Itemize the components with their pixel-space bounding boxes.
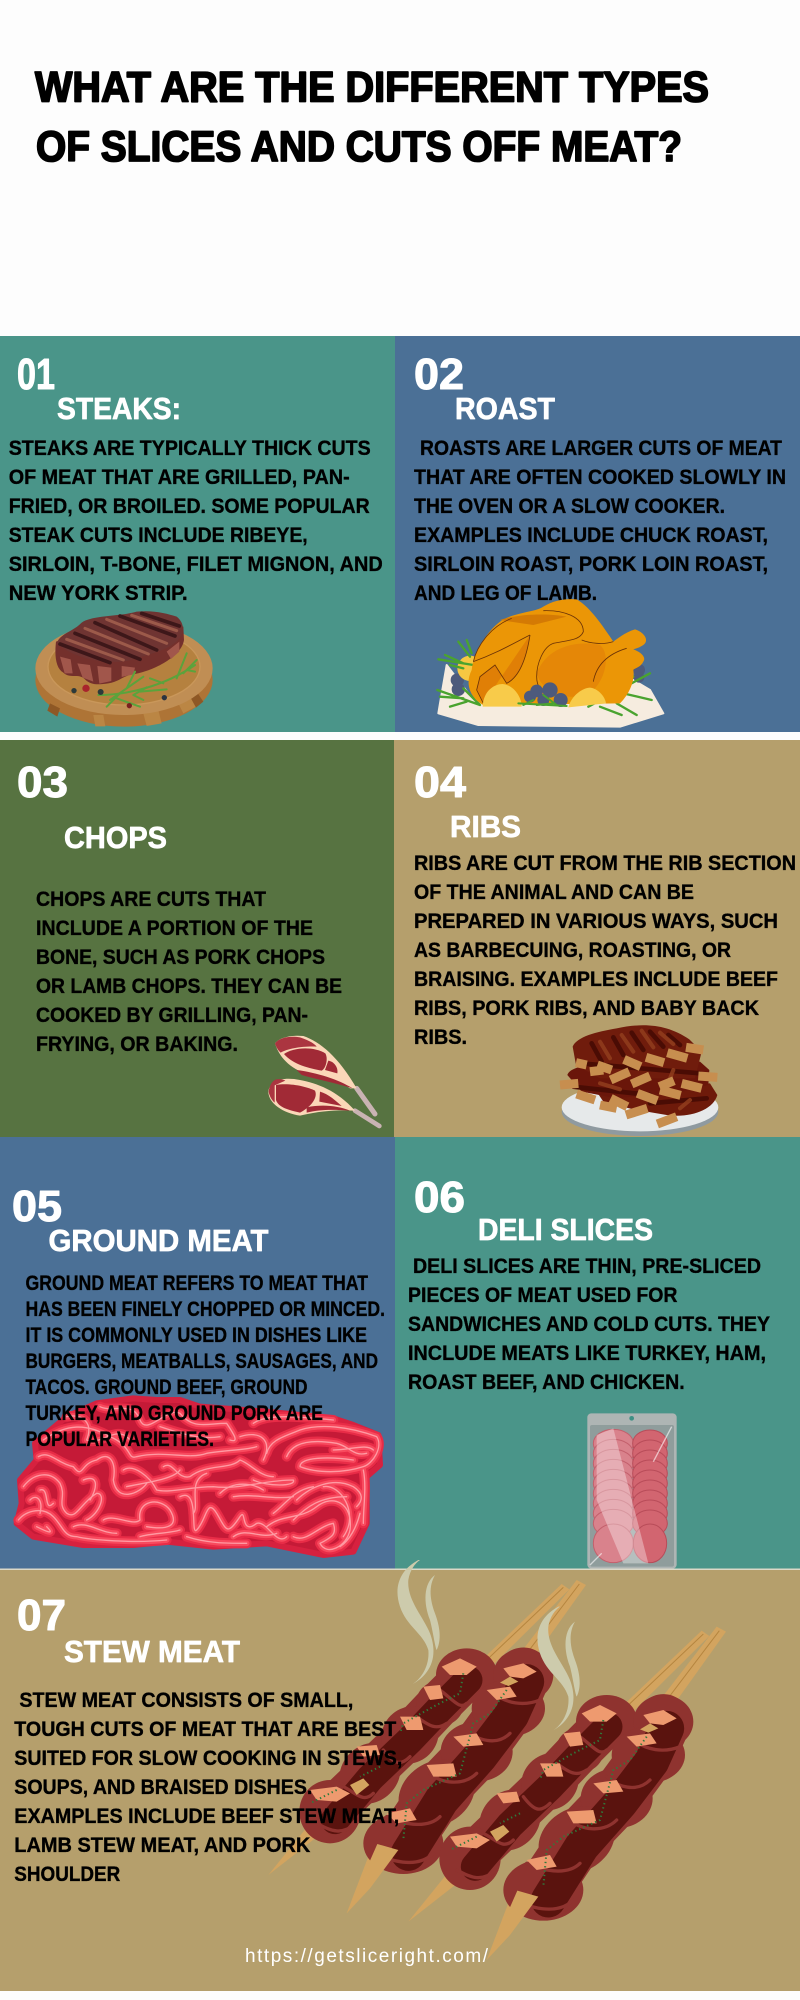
number 01: 01 (17, 350, 55, 399)
panel: 07 stew meat (0, 1560, 800, 1991)
text: deli description (408, 1255, 770, 1394)
heading: steaks: STEAKS: (57, 391, 181, 426)
text: chops description: INCLUDE A PORTION OF THE (36, 917, 313, 940)
text: ground meat description: BURGERS, MEATBALLS, SAUSAGES, AND (26, 1350, 378, 1373)
text: ground meat description: TACOS. GROUND BEEF, GROUND (26, 1376, 308, 1399)
text: steaks description: STEAKS ARE TYPICALLY THICK CUTS (9, 437, 371, 460)
number 04: 04 (414, 758, 467, 807)
text: chops description (36, 888, 342, 1056)
text: ground meat description: GROUND MEAT REFERS TO MEAT THAT (26, 1272, 368, 1295)
text: ribs description: OF THE ANIMAL AND CAN BE (414, 881, 694, 904)
text: ground meat description: POPULAR VARIETIES. (26, 1428, 214, 1451)
text: steaks description (9, 437, 383, 605)
text: roast description: AND LEG OF LAMB. (414, 582, 597, 605)
panel: 05 ground meat (0, 1137, 395, 1569)
text: deli description: ROAST BEEF, AND CHICKEN. (408, 1371, 685, 1394)
text: stew meat description: STEW MEAT CONSISTS OF SMALL, (19, 1689, 353, 1712)
text: ribs description: AS BARBECUING, ROASTING, OR (414, 939, 731, 962)
title: OF SLICES AND CUTS OFF MEAT? (36, 123, 682, 171)
heading: deli slices: DELI SLICES (478, 1212, 653, 1247)
text: ribs description (414, 852, 796, 1049)
number 03: 03 (17, 758, 68, 807)
text: chops description: OR LAMB CHOPS. THEY CAN BE (36, 975, 342, 998)
title: WHAT ARE THE DIFFERENT TYPES (35, 64, 709, 112)
text: chops description: COOKED BY GRILLING, PAN- (36, 1004, 308, 1027)
text: ribs description: RIBS. (414, 1026, 467, 1049)
text: stew meat description: SOUPS, AND BRAISED DISHES. (14, 1776, 312, 1799)
text: ground meat description: HAS BEEN FINELY CHOPPED OR MINCED. (26, 1298, 385, 1321)
text: steaks description: OF MEAT THAT ARE GRILLED, PAN- (9, 466, 350, 489)
icon: packaged deli slices (587, 1413, 677, 1569)
text: stew meat description: SHOULDER (14, 1863, 120, 1886)
text: steaks description: STEAK CUTS INCLUDE RIBEYE, (9, 524, 308, 547)
text: steaks description: FRIED, OR BROILED. SOME POPULAR (9, 495, 370, 518)
text: roast description: EXAMPLES INCLUDE CHUCK ROAST, (414, 524, 768, 547)
panel: 04 ribs (394, 740, 800, 1137)
icon: meat skewers with steam (268, 1560, 726, 1960)
icon: ribs on plate (560, 1025, 718, 1136)
text: ribs description: PREPARED IN VARIOUS WAYS, SUCH (414, 910, 778, 933)
text: stew meat description: LAMB STEW MEAT, AND PORK (14, 1834, 310, 1857)
text: steaks description: NEW YORK STRIP. (9, 582, 188, 605)
heading: ribs: RIBS (450, 809, 521, 844)
text: steaks description: SIRLOIN, T-BONE, FILET MIGNON, AND (9, 553, 383, 576)
text: chops description: CHOPS ARE CUTS THAT (36, 888, 266, 911)
text: deli description: DELI SLICES ARE THIN, PRE-SLICED (413, 1255, 761, 1278)
icon: ground meat (17, 1398, 380, 1555)
panel: 03 chops (0, 740, 394, 1137)
text: roast description: THE OVEN OR A SLOW COOKER. (414, 495, 725, 518)
title (35, 64, 709, 171)
text: stew meat description: SUITED FOR SLOW COOKING IN STEWS, (14, 1747, 402, 1770)
text: ribs description: RIBS, PORK RIBS, AND BABY BACK (414, 997, 759, 1020)
heading: chops: CHOPS (64, 820, 167, 855)
number 05: 05 (12, 1182, 62, 1231)
source url: https://getsliceright.com/ (245, 1946, 489, 1967)
heading: ground meat: GROUND MEAT (48, 1223, 269, 1258)
text: chops description: FRYING, OR BAKING. (36, 1033, 238, 1056)
text: deli description: SANDWICHES AND COLD CUTS. THEY (408, 1313, 770, 1336)
panel: 06 deli slices (395, 1137, 800, 1569)
text: chops description: BONE, SUCH AS PORK CHOPS (36, 946, 325, 969)
text: stew meat description: EXAMPLES INCLUDE BEEF STEW MEAT, (14, 1805, 399, 1828)
text: ground meat description: TURKEY, AND GROUND PORK ARE (26, 1402, 323, 1425)
text: roast description (414, 437, 786, 605)
text: stew meat description (14, 1689, 402, 1886)
icon: roast turkey on platter (437, 599, 663, 727)
number 02: 02 (414, 350, 464, 399)
icon: steak on wooden board (35, 611, 213, 727)
text: ribs description: BRAISING. EXAMPLES INCLUDE BEEF (414, 968, 778, 991)
heading: roast: ROAST (455, 391, 555, 426)
number 06: 06 (414, 1173, 465, 1222)
text: ground meat description: IT IS COMMONLY USED IN DISHES LIKE (26, 1324, 367, 1347)
text: roast description: SIRLOIN ROAST, PORK LOIN ROAST, (414, 553, 768, 576)
number 07: 07 (17, 1591, 66, 1640)
text: stew meat description: TOUGH CUTS OF MEAT THAT ARE BEST (14, 1718, 396, 1741)
text: ground meat description (26, 1272, 385, 1451)
panel: 01 steaks (0, 336, 395, 732)
text: deli description: PIECES OF MEAT USED FOR (408, 1284, 678, 1307)
heading: stew meat: STEW MEAT (64, 1634, 240, 1669)
text: deli description: INCLUDE MEATS LIKE TURKEY, HAM, (408, 1342, 766, 1365)
icon: lamb chops (268, 1036, 379, 1126)
panel: 02 roast (395, 336, 800, 732)
